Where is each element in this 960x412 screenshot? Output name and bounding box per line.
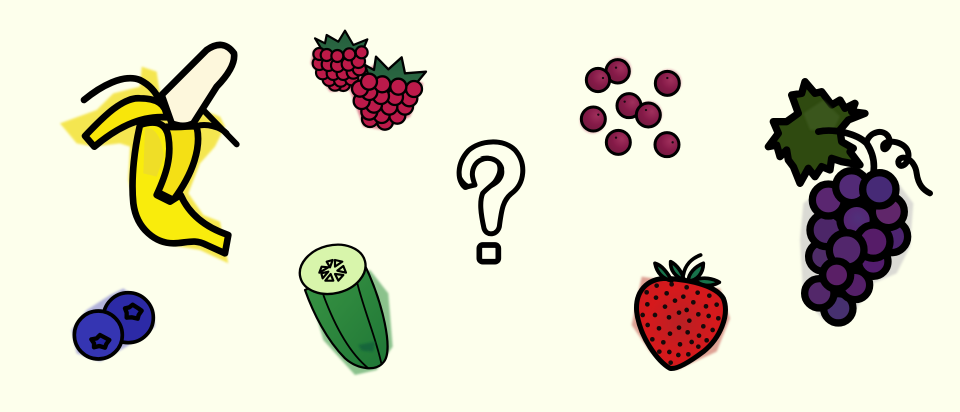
strawberry seeds	[640, 282, 721, 365]
left raspberry	[313, 31, 368, 91]
right raspberry	[352, 57, 426, 130]
icon: cranberries	[580, 57, 681, 157]
icon: banana	[60, 45, 237, 263]
vine leaf	[768, 82, 865, 183]
icon: blueberries	[72, 288, 155, 362]
icon: cucumber	[295, 238, 393, 375]
cranberry dots	[597, 66, 674, 143]
icon: raspberries	[311, 31, 426, 130]
icon: grapes	[768, 82, 930, 323]
cucumber seeds	[319, 260, 346, 281]
icon: question mark	[458, 142, 523, 262]
icon: strawberry	[632, 255, 730, 370]
strawberry leaves	[655, 262, 719, 285]
